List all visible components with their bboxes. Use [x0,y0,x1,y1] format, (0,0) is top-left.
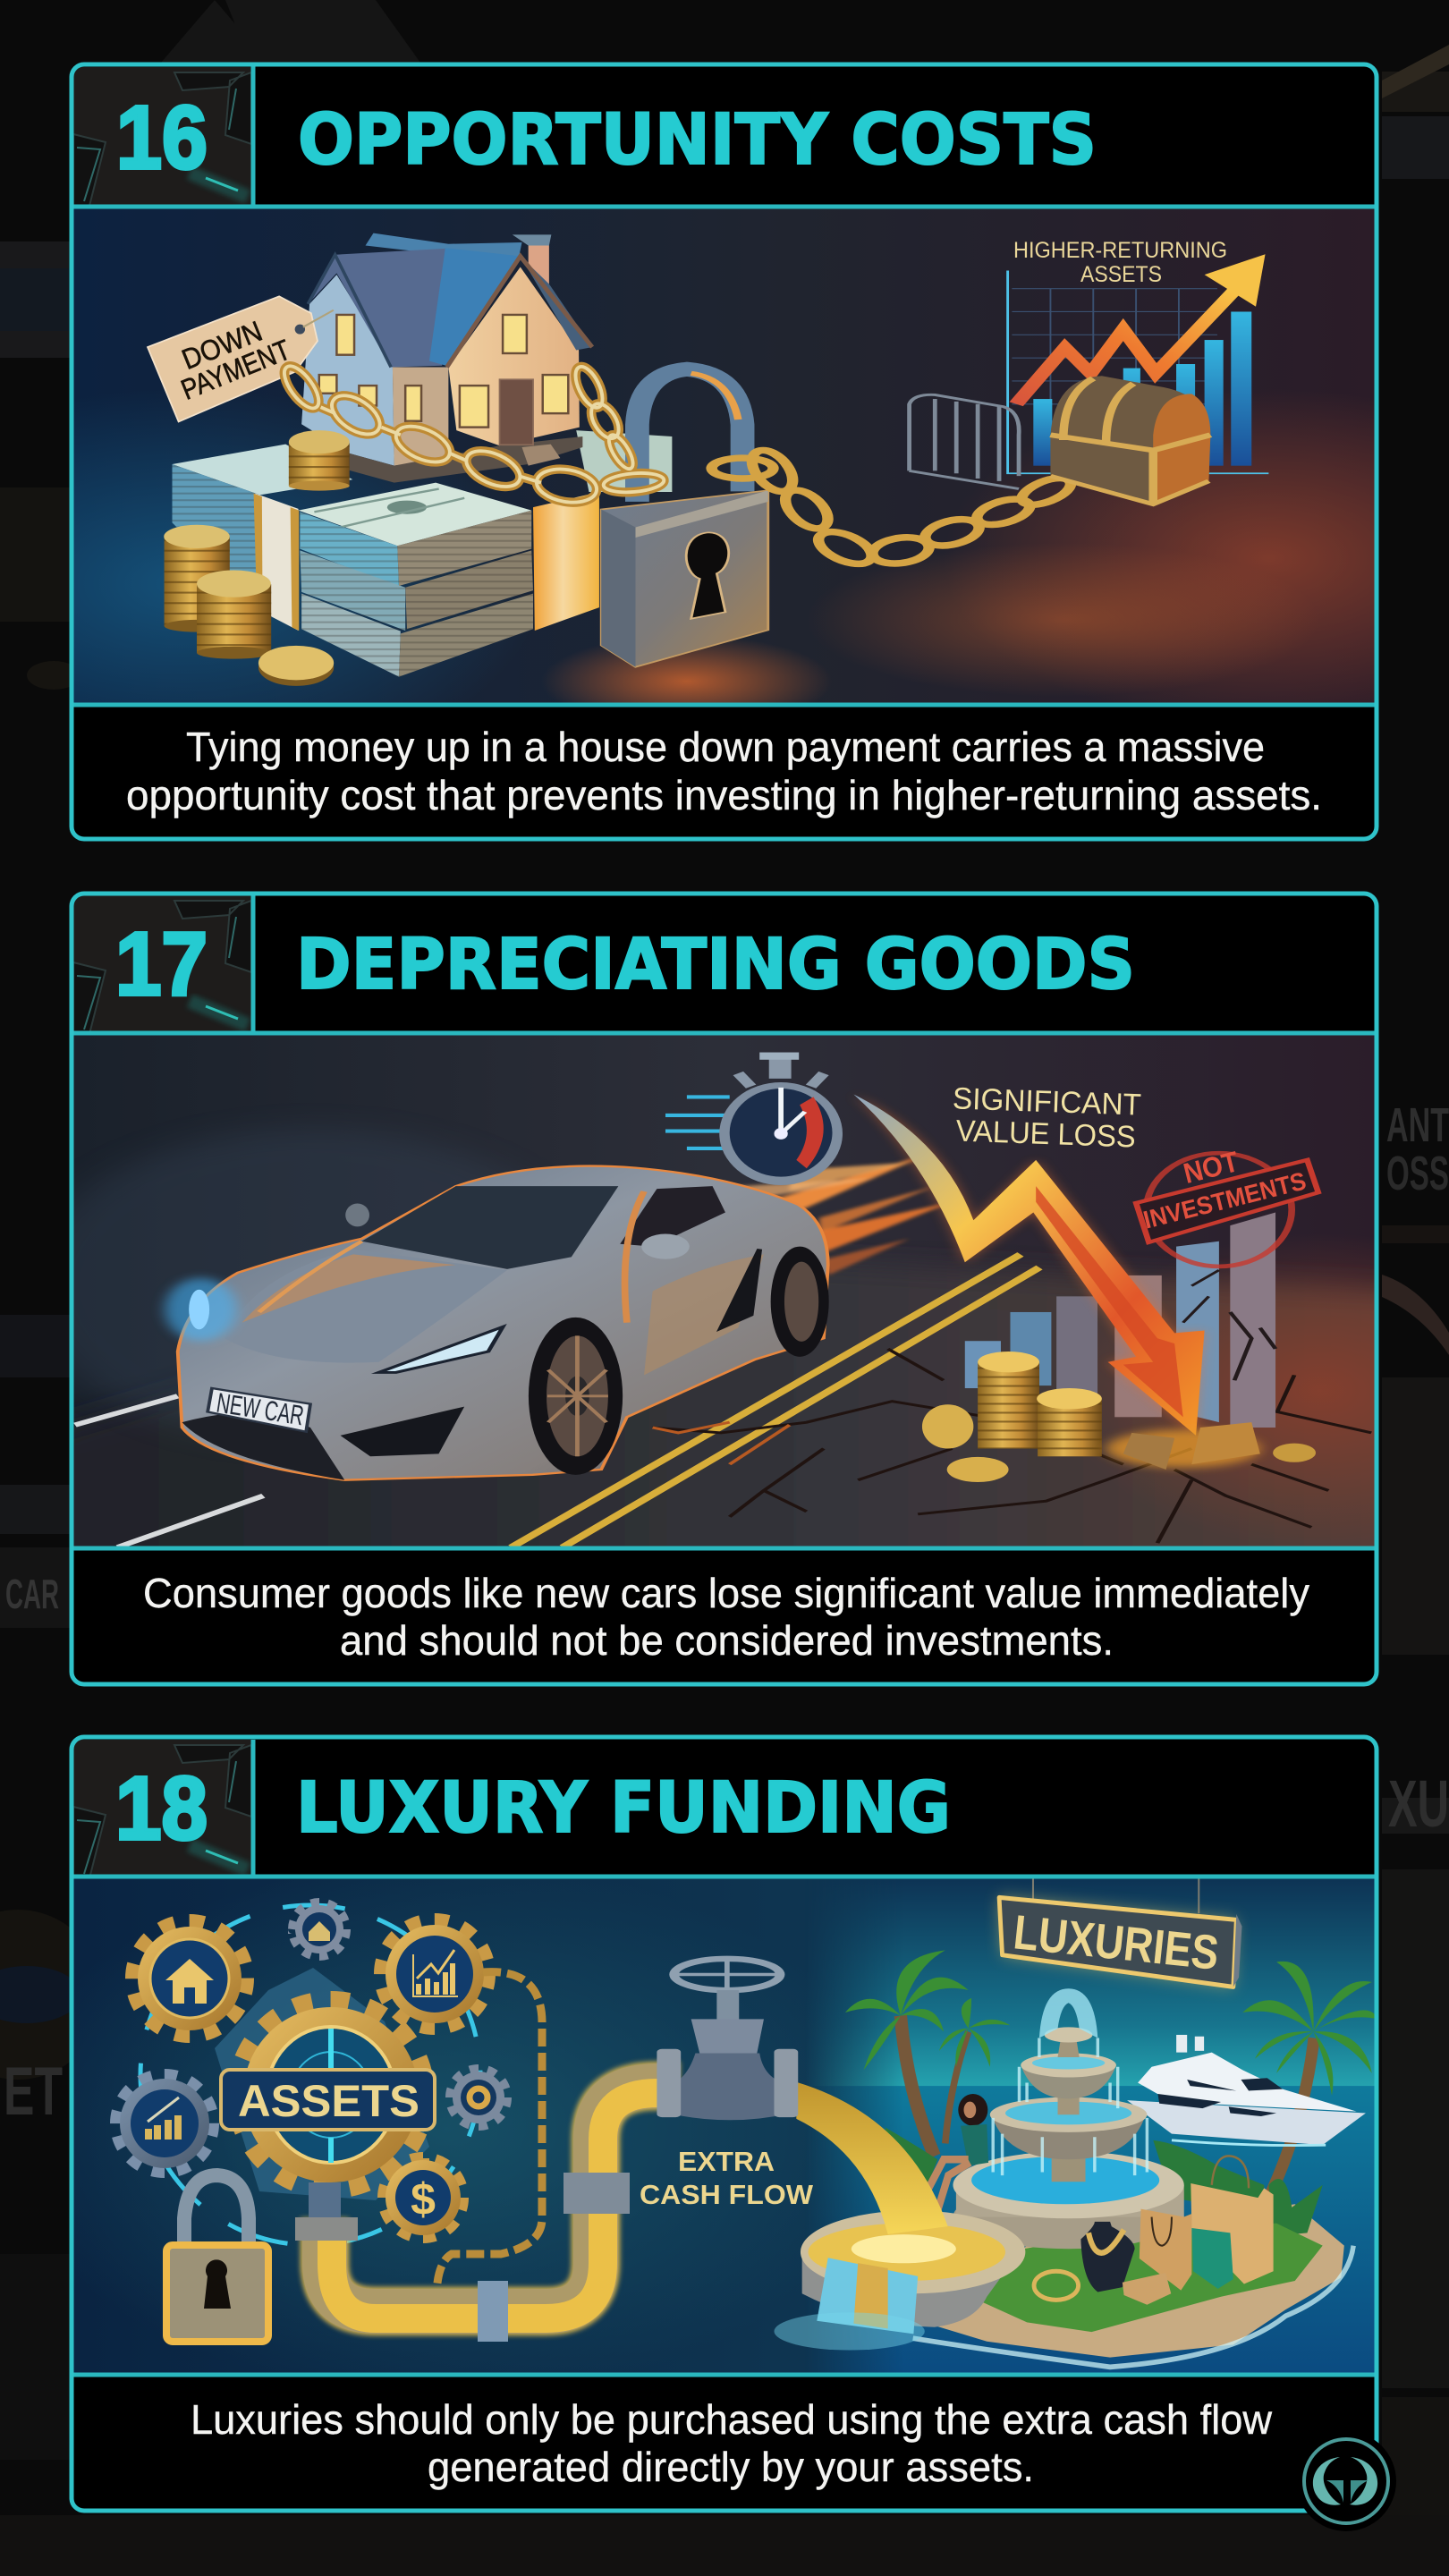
heading: depreciating goods: DEPRECIATING GOODS [296,925,1135,1005]
gear: dollar [384,2158,462,2237]
heading: luxury funding: LUXURY FUNDING [296,1768,951,1849]
number tile 17 [73,895,252,1034]
panel: depreciating goods [0,894,1449,1684]
gear: house [134,1923,245,2034]
icon: falling arrow [853,1094,1205,1436]
icon: barrier [910,394,1019,489]
icon: chain to pipe [436,1972,542,2299]
icon: gold chain [278,361,665,506]
pipe label: EXTRA [678,2146,775,2177]
icon: seated woman [925,2094,988,2210]
icon: tiered fountain [953,1988,1184,2249]
number tile 17: 17 [115,914,208,1014]
value loss label: VALUE LOSS [955,1114,1136,1154]
number tile 18 [73,1740,252,1878]
value loss label [951,1081,1142,1155]
icon: yacht [1127,2035,1366,2146]
chart label: ASSETS [1080,262,1162,287]
icon: house [301,233,592,483]
caption [191,2396,1273,2490]
gear: small house [292,1902,346,1956]
tag label: DOWN [177,315,267,376]
sign label: LUXURIES [1011,1905,1221,1980]
caption [126,724,1322,818]
caption: Tying money up in a house down payment carries a massive [186,724,1265,770]
illustration: house down payment chained away from assets [73,209,1374,703]
icon: island sand [935,2204,1344,2358]
illustration: car losing value [73,1036,1374,1546]
stamp text: INVESTMENTS [1140,1166,1309,1234]
tag label [166,308,295,406]
icon: price tag [148,296,334,421]
chart label: HIGHER-RETURNING [1013,238,1227,263]
caption [143,1570,1309,1664]
icon: stopwatch [665,1053,843,1185]
icon: gold coin stacks [164,430,350,686]
stamp text: NOT [1180,1145,1242,1190]
panel: luxury funding [0,1737,1387,2511]
icon: valve [657,1959,798,2120]
icon: shopping bags and jewelry [1034,2156,1274,2305]
gear: main [239,2003,423,2187]
number tile 16: 16 [116,88,208,188]
gear: chart [383,1922,487,2026]
dark background with faded oversized scene details: ET [4,2054,63,2130]
number tile 18: 18 [115,1758,208,1859]
icon: motion streaks [741,1157,941,1276]
badge [221,2070,435,2130]
chart label [1013,238,1227,287]
illustration: assets funding luxuries [0,1860,1387,2397]
value loss label: SIGNIFICANT [952,1081,1142,1123]
gear: growth [118,2077,211,2170]
icon: gold basin [801,2210,1025,2327]
caption: Luxuries should only be purchased using the extra cash flow [191,2396,1273,2443]
icon: gold coins [922,1352,1316,1482]
road cracks [653,1349,1371,1543]
icon: golden pipe [295,2086,680,2342]
caption: and should not be considered investments. [340,1617,1114,1664]
gear: sun [450,2069,507,2126]
caption: opportunity cost that prevents investing in higher-returning assets. [126,772,1322,818]
tag label: PAYMENT [176,333,295,406]
number tile 16 [73,67,252,206]
caption: Consumer goods like new cars lose significant value immediately [143,1570,1309,1616]
icon: chain to chest [706,447,1076,567]
icon: red stamp [1136,1153,1318,1267]
icon: treasure chest [1050,376,1210,504]
pipe label: CASH FLOW [640,2179,814,2210]
pipe label [640,2146,814,2210]
gear: dollar: $ [411,2174,436,2224]
dark background with faded oversized scene details: CAR [5,1571,59,1617]
scene: sky and sea [771,1878,1387,2380]
panel: opportunity costs [0,64,1449,839]
heading: opportunity costs: OPPORTUNITY COSTS [298,100,1097,181]
licence plate text: NEW CAR [215,1387,306,1431]
icon: stack of cash [172,430,672,677]
scene: luxury island [801,1878,1377,2367]
badge: ASSETS [238,2076,419,2126]
assets gears cluster [118,1902,507,2245]
icon: palm trees [845,1950,1377,2195]
icon: pouring cash flow [774,2082,948,2351]
logo badge [1296,2431,1396,2531]
icon: sports car [165,1166,829,1480]
icon: hanging sign board [999,1878,1241,1987]
icon: broken bars [965,1212,1275,1428]
caption: generated directly by your assets. [428,2444,1034,2490]
road markings [75,1254,1039,1547]
icon: gold padlock [166,2175,268,2342]
icon: padlock [601,369,768,667]
line chart: rising returns [1008,254,1268,473]
stamp text [1131,1131,1309,1234]
